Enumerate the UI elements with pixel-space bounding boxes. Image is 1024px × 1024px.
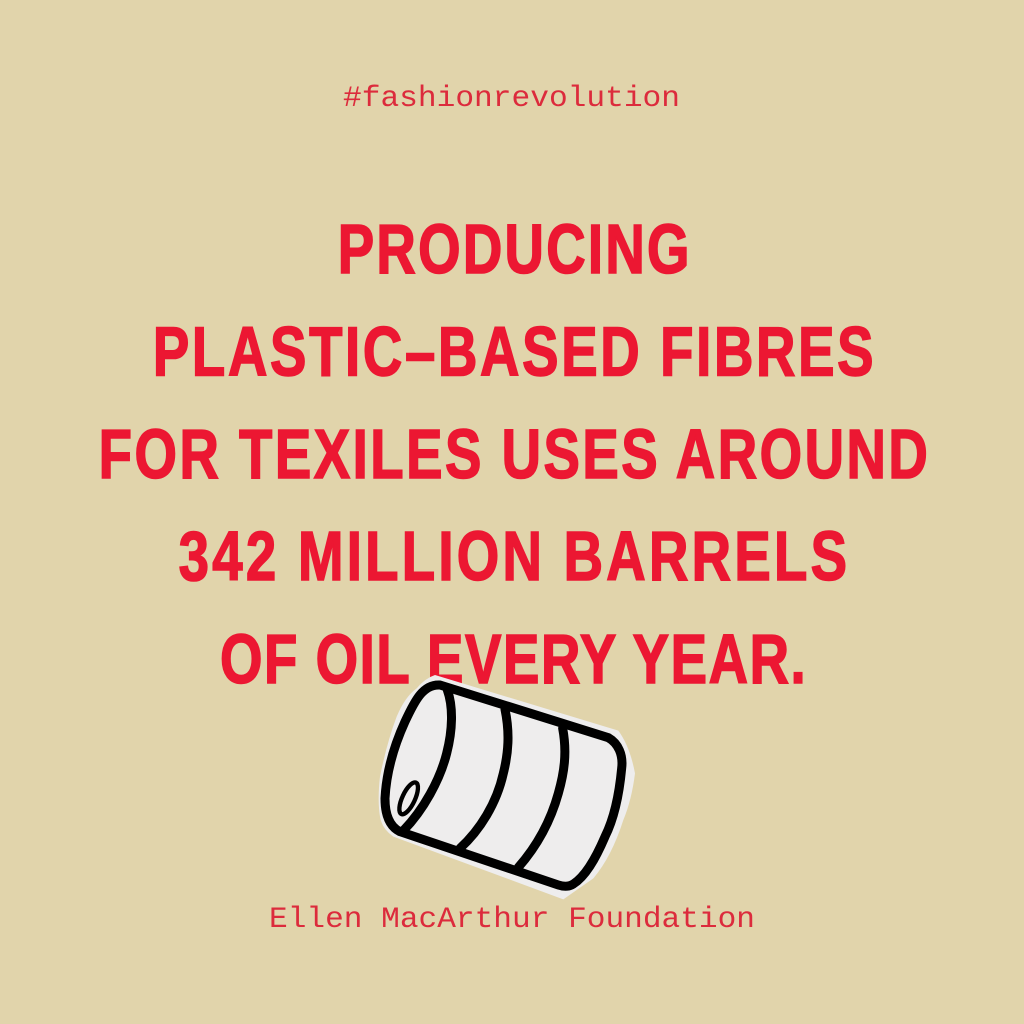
headline: FOR TEXILES USES AROUND xyxy=(99,416,928,494)
headline: PLASTIC–BASED FIBRES xyxy=(153,313,874,391)
headline xyxy=(99,211,928,699)
hashtag: #fashionrevolution xyxy=(343,82,680,116)
headline: 342 MILLION BARRELS xyxy=(179,518,847,596)
source credit: Ellen MacArthur Foundation xyxy=(269,903,755,937)
headline: PRODUCING xyxy=(338,211,690,289)
icon: oil barrel sticker xyxy=(379,675,635,899)
headline: OF OIL EVERY YEAR. xyxy=(220,621,806,699)
